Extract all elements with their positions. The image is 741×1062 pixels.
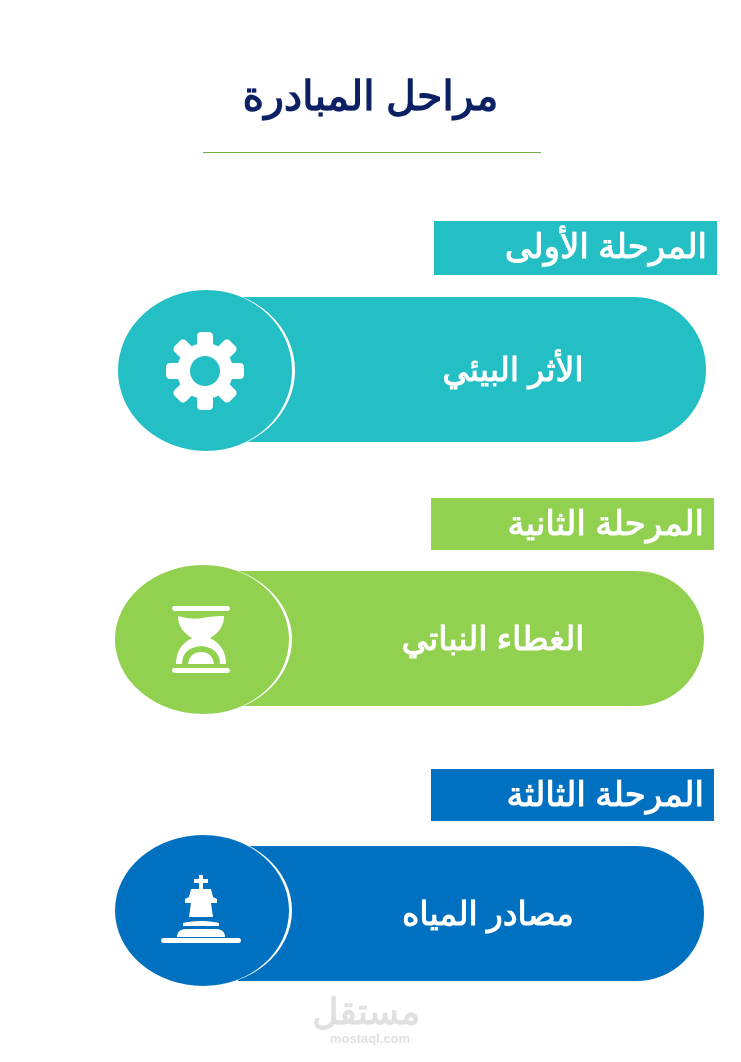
icon: gear bbox=[166, 332, 244, 410]
stage 1 circle with gear icon bbox=[118, 290, 295, 451]
title: مراحل المبادرة bbox=[243, 73, 498, 119]
stage 1 label: المرحلة الأولى bbox=[505, 228, 707, 266]
stage 1 pill: الأثر البيئي bbox=[442, 351, 584, 388]
stage 3 label: المرحلة الثالثة bbox=[507, 776, 704, 814]
stage 3 pill: مصادر المياه bbox=[402, 895, 574, 932]
icon: chess king bbox=[161, 875, 241, 943]
stage 2 circle with hourglass icon bbox=[115, 565, 292, 714]
icon: hourglass bbox=[172, 606, 230, 673]
stage 2 label: المرحلة الثانية bbox=[507, 505, 704, 543]
stage 2 pill bbox=[238, 571, 704, 706]
stage 3 circle with chess king icon bbox=[115, 835, 292, 986]
stage 2 pill: الغطاء النباتي bbox=[402, 620, 584, 657]
stage 3 pill bbox=[238, 846, 704, 981]
watermark: مستقل bbox=[312, 991, 420, 1032]
stage 2 label bbox=[431, 498, 714, 550]
stage 1 pill bbox=[240, 297, 706, 442]
watermark: mostaql.com bbox=[330, 1031, 410, 1046]
stage 1 label bbox=[434, 221, 717, 275]
stage 3 label bbox=[431, 769, 714, 821]
